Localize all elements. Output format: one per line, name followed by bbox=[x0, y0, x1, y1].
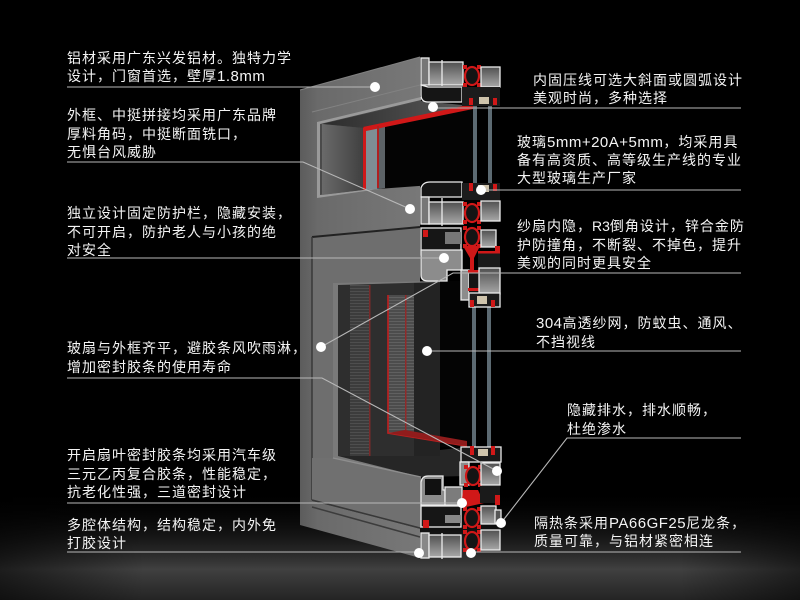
callout: insect screen: 304高透纱网，防蚊虫、通风、 bbox=[536, 315, 743, 332]
callout: thermal break strip: 隔热条采用PA66GF25尼龙条， bbox=[534, 515, 746, 532]
frame front face bbox=[300, 57, 420, 558]
profile cross-section: top frame bbox=[421, 58, 500, 106]
callout: sealing strips: 开启扇叶密封胶条均采用汽车级 bbox=[67, 447, 277, 463]
callout: fixed guard rail bbox=[67, 205, 449, 263]
callout: outer frame corner joints: 无惧台风威胁 bbox=[67, 144, 157, 160]
callout: thermal break strip bbox=[466, 515, 746, 558]
callout: multi-chamber structure: 多腔体结构，结构稳定，内外免 bbox=[67, 517, 277, 533]
callout: multi-chamber structure: 打胶设计 bbox=[67, 535, 127, 551]
callout: hidden drainage bbox=[496, 402, 741, 528]
callout: glass specification: 大型玻璃生产厂家 bbox=[517, 170, 637, 186]
callout: inner glazing bead bbox=[428, 72, 743, 112]
callout: hidden drainage: 杜绝渗水 bbox=[567, 421, 627, 437]
callout: glass specification: 玻璃5mm+20A+5mm，均采用具 bbox=[517, 134, 738, 151]
callout: aluminium material bbox=[67, 50, 380, 92]
callout: thermal break strip: 质量可靠，与铝材紧密相连 bbox=[534, 533, 714, 549]
glass panes bbox=[472, 105, 492, 447]
callout: flush sash bbox=[67, 340, 502, 476]
callout: outer frame corner joints bbox=[67, 107, 415, 214]
callout: outer frame corner joints: 厚料角码，中挺断面铣口， bbox=[67, 126, 247, 142]
callout: flush sash: 玻扇与外框齐平，避胶条风吹雨淋， bbox=[67, 340, 307, 356]
callout: multi-chamber structure bbox=[67, 517, 424, 558]
callout: aluminium material: 设计，门窗首选，壁厚1.8mm bbox=[67, 68, 265, 85]
lower opening with insect screen bbox=[312, 281, 473, 528]
callout: fixed guard rail: 对安全 bbox=[67, 242, 112, 258]
lower sash bbox=[312, 227, 420, 528]
callout: inner glazing bead: 美观时尚，多种选择 bbox=[533, 90, 668, 106]
callout: outer frame corner joints: 外框、中挺拼接均采用广东品牌 bbox=[67, 107, 277, 123]
callout: sealing strips: 抗老化性强，三道密封设计 bbox=[67, 484, 247, 500]
callout: sealing strips bbox=[67, 447, 467, 508]
callout: flush sash: 增加密封胶条的使用寿命 bbox=[67, 359, 232, 375]
callout: insect screen: 不挡视线 bbox=[536, 334, 596, 350]
callout: hidden screen sash: 护防撞角，不断裂、不掉色，提升 bbox=[517, 237, 742, 253]
profile cross-section: bottom sash and frame bbox=[421, 446, 501, 559]
profile cross-section: transom and upper sash bbox=[421, 182, 500, 307]
frame moulding lines bbox=[300, 57, 420, 537]
window frame illustration bbox=[300, 57, 473, 558]
callout: sealing strips: 三元乙丙复合胶条，性能稳定， bbox=[67, 466, 277, 482]
callout: inner glazing bead: 内固压线可选大斜面或圆弧设计 bbox=[533, 72, 743, 88]
callout: hidden drainage: 隐藏排水，排水顺畅， bbox=[567, 402, 717, 418]
callout: hidden screen sash: 美观的同时更具安全 bbox=[517, 255, 652, 271]
callout: hidden screen sash: 纱扇内隐，R3倒角设计，锌合金防 bbox=[517, 218, 745, 234]
callout: fixed guard rail: 独立设计固定防护栏，隐藏安装， bbox=[67, 205, 292, 221]
callout: glass specification bbox=[476, 134, 742, 195]
callout: insect screen bbox=[422, 315, 743, 356]
callout: aluminium material: 铝材采用广东兴发铝材。独特力学 bbox=[67, 50, 292, 66]
upper opening bbox=[317, 97, 473, 198]
callout: fixed guard rail: 不可开启，防护老人与小孩的绝 bbox=[67, 224, 277, 240]
callout: glass specification: 备有高资质、高等级生产线的专业 bbox=[517, 152, 742, 168]
callout: hidden screen sash bbox=[316, 218, 745, 352]
